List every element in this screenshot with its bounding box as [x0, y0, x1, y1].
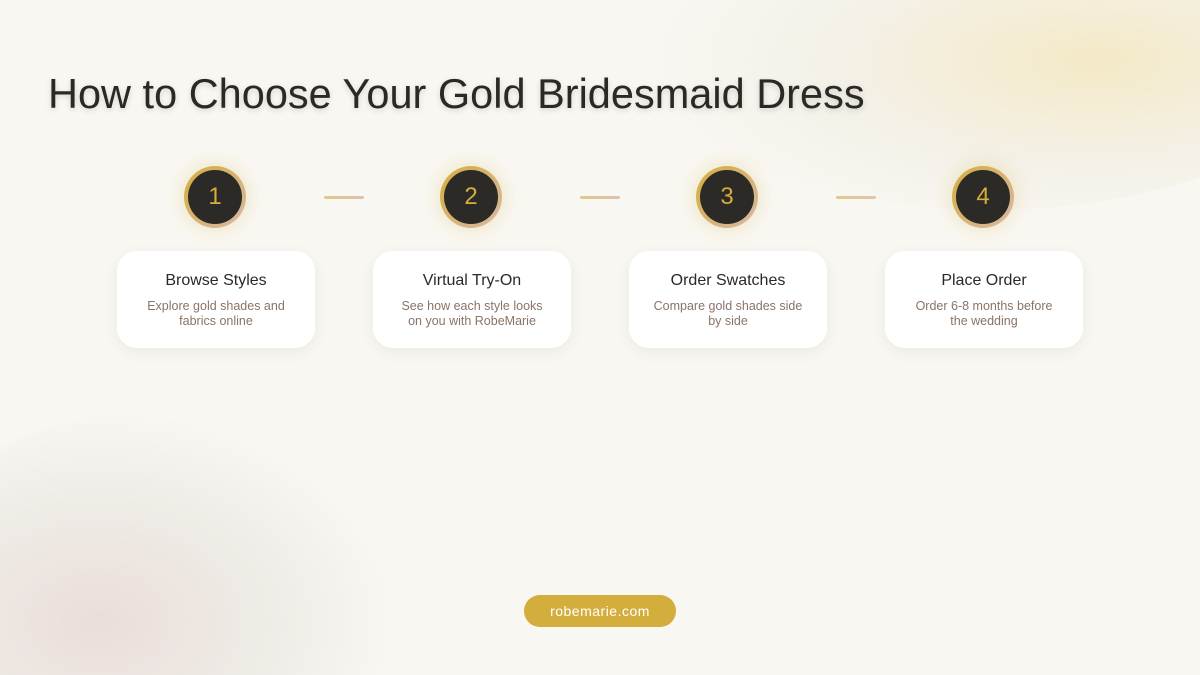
card: browse styles — [117, 251, 315, 348]
card: order swatches — [629, 251, 827, 348]
step 3 circle: 3 — [720, 183, 734, 210]
title: How to Choose Your Gold Bridesmaid Dress — [48, 70, 865, 117]
step 1 circle — [184, 166, 246, 228]
step 1 circle: 1 — [208, 183, 222, 210]
card: browse styles: Browse Styles — [165, 272, 267, 289]
step 3 circle — [696, 166, 758, 228]
step 4 circle: 4 — [976, 183, 990, 210]
step 2 circle — [440, 166, 502, 228]
step 2 circle: 2 — [464, 183, 478, 210]
footer pill — [524, 595, 676, 627]
card: virtual try-on — [373, 251, 571, 348]
card: order swatches: Compare gold shades side by side — [654, 299, 802, 328]
step 4 circle — [952, 166, 1014, 228]
card: place order: Order 6-8 months before the wedding — [916, 299, 1052, 328]
connector 1 — [324, 196, 364, 199]
footer pill: robemarie.com — [550, 603, 650, 619]
card: order swatches: Order Swatches — [671, 272, 785, 289]
card: virtual try-on: See how each style looks on you with RobeMarie — [401, 299, 543, 328]
card: virtual try-on: Virtual Try-On — [423, 272, 521, 289]
card: place order — [885, 251, 1083, 348]
card: browse styles: Explore gold shades and fabrics online — [147, 299, 285, 328]
connector 3 — [836, 196, 876, 199]
card: place order: Place Order — [941, 272, 1027, 289]
connector 2 — [580, 196, 620, 199]
